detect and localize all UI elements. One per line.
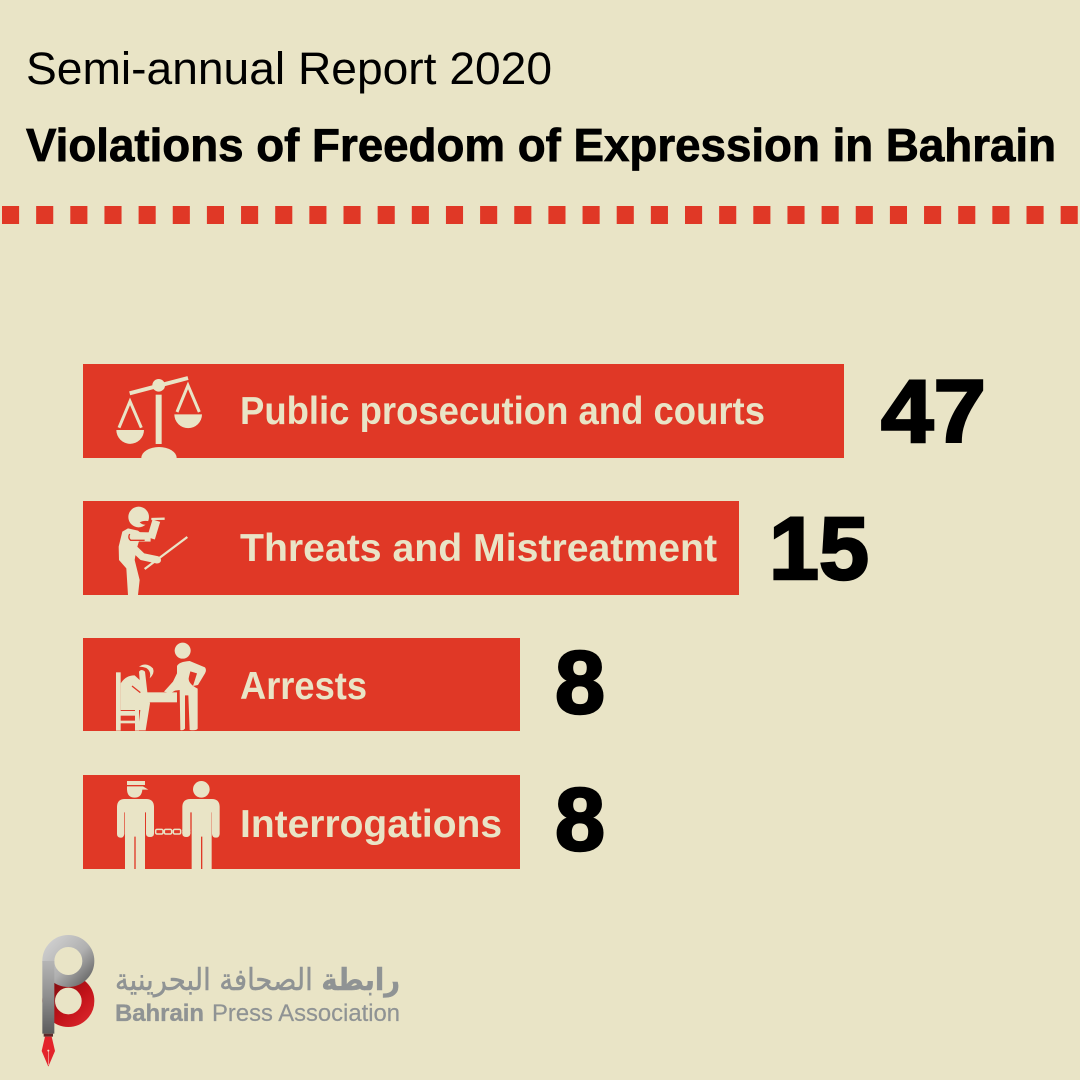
panel: interrogations bbox=[83, 775, 520, 869]
title: Violations of Freedom of Expression in Bahrain bbox=[26, 119, 1056, 171]
english logotype bold: Bahrain bbox=[115, 1000, 204, 1027]
panel: threats and mistreatment bbox=[83, 501, 739, 595]
value: 47: 47 bbox=[881, 361, 986, 461]
logo: Bahrain Press Association bbox=[42, 941, 400, 1067]
logo mark: pen letter B bbox=[42, 941, 88, 1067]
subtitle: Semi-annual Report 2020 bbox=[26, 43, 552, 94]
value: 8 (interrogations): 8 bbox=[555, 769, 605, 869]
label: Interrogations bbox=[240, 803, 502, 846]
icon: seated figure and standing figure bbox=[116, 643, 206, 731]
label: Public prosecution and courts bbox=[240, 390, 765, 433]
value: 15: 15 bbox=[769, 498, 869, 598]
dotted divider bbox=[2, 206, 1080, 224]
icon: scales of justice bbox=[116, 378, 202, 458]
panel: public prosecution and courts bbox=[83, 364, 844, 458]
icon: figure with baton bbox=[119, 507, 187, 595]
value: 8 (arrests): 8 bbox=[555, 632, 605, 732]
label: Arrests bbox=[240, 665, 367, 708]
arabic logotype: رابطة الصحافة البحرينية bbox=[115, 963, 400, 998]
english logotype regular: Press Association bbox=[212, 1000, 400, 1027]
panel: arrests bbox=[83, 638, 520, 731]
icon: officer chained to prisoner bbox=[117, 781, 220, 869]
label: Threats and Mistreatment bbox=[240, 527, 717, 570]
